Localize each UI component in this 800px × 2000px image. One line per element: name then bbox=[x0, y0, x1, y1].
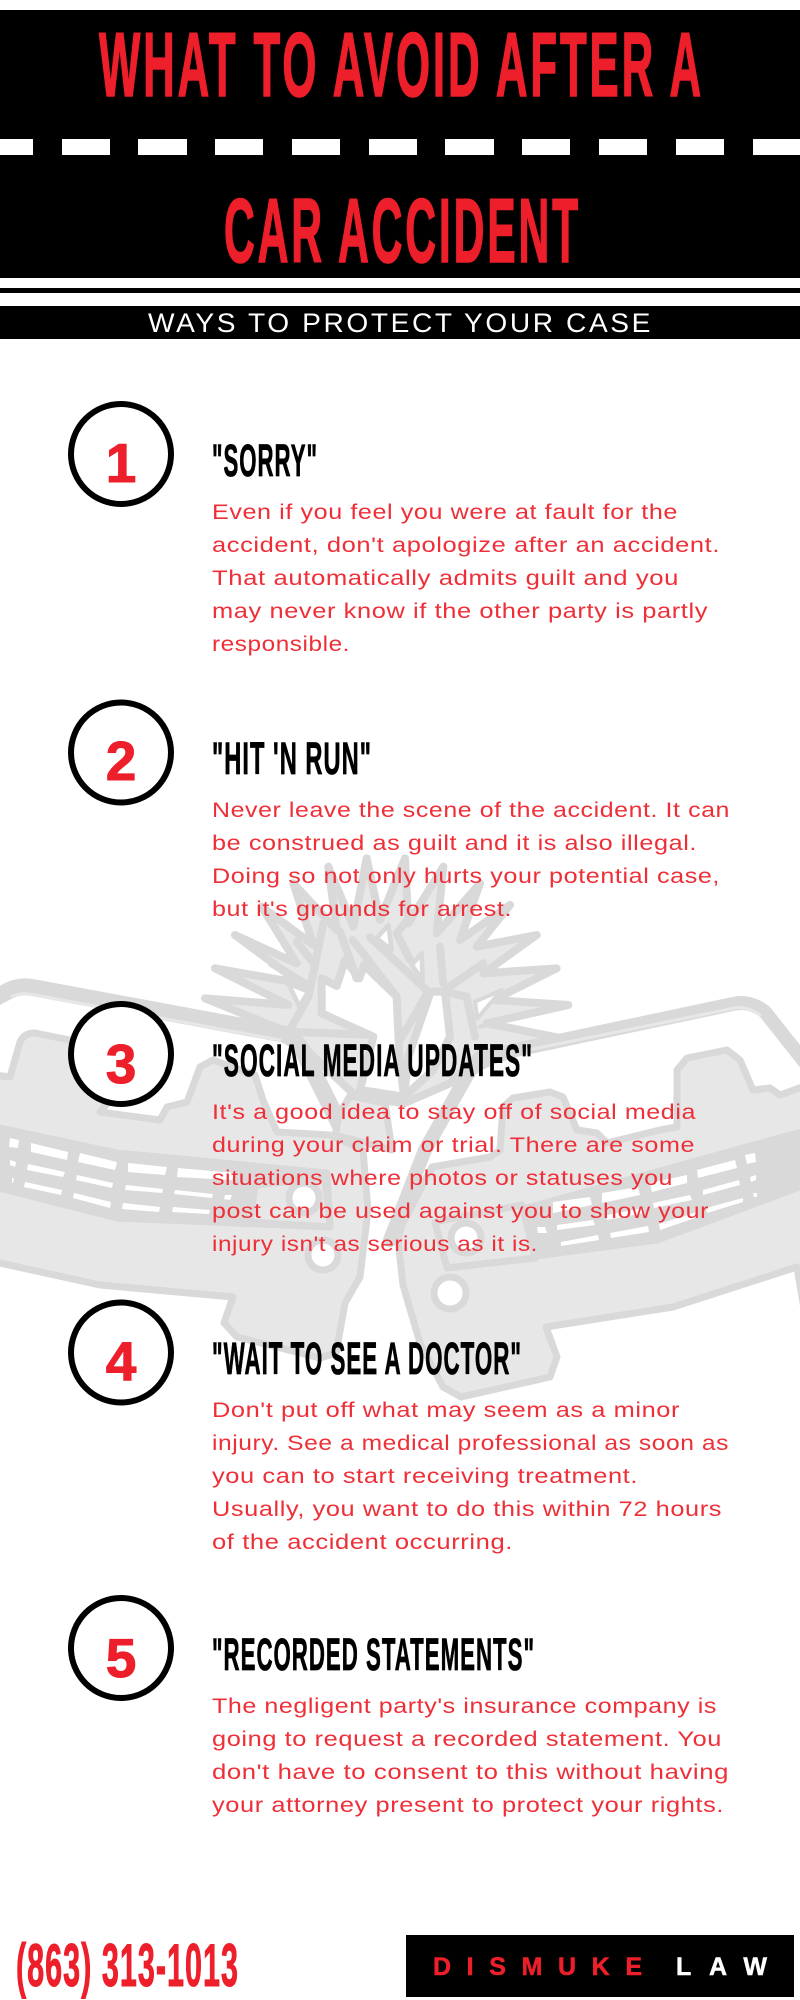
body 3: situations where photos or statuses you bbox=[212, 1166, 673, 1190]
number badge 4: 4 bbox=[106, 1330, 137, 1392]
body 3: It's a good idea to stay off of social media bbox=[212, 1100, 696, 1124]
body 4: Don't put off what may seem as a minor bbox=[212, 1398, 680, 1422]
body 2 bbox=[212, 798, 730, 921]
step 3 bbox=[71, 1004, 709, 1256]
right car: body bbox=[398, 1050, 800, 1397]
body 1: responsible. bbox=[212, 632, 350, 656]
body 1 bbox=[212, 500, 720, 656]
logo: Dismuke Law: DISMUKE bbox=[433, 1953, 642, 1981]
body 1: may never know if the other party is partly bbox=[212, 599, 708, 623]
number badge 5: 5 bbox=[106, 1627, 136, 1689]
body 1: Even if you feel you were at fault for the bbox=[212, 500, 678, 524]
body 4: Usually, you want to do this within 72 hours bbox=[212, 1497, 722, 1521]
subtitle bar: WAYS TO PROTECT YOUR CASE bbox=[148, 308, 653, 338]
body 4: you can to start receiving treatment. bbox=[212, 1464, 638, 1488]
body 5: going to request a recorded statement. You bbox=[212, 1727, 722, 1751]
left car: headlight bbox=[250, 1178, 330, 1227]
body 3: injury isn't as serious as it is. bbox=[212, 1232, 538, 1256]
body 3: post can be used against you to show your bbox=[212, 1199, 709, 1223]
illustration: crashed cars and impact burst bbox=[0, 858, 800, 1397]
body 4 bbox=[212, 1398, 729, 1554]
road dashes bbox=[0, 139, 800, 155]
header banner bbox=[0, 10, 800, 282]
number badge 1: 1 bbox=[106, 432, 136, 494]
number badge 5 bbox=[71, 1598, 171, 1698]
number badge 2 bbox=[71, 702, 171, 802]
body 4: injury. See a medical professional as soon as bbox=[212, 1431, 729, 1455]
left car: body bbox=[0, 1033, 368, 1358]
left car: grille bbox=[0, 1127, 330, 1227]
body 5: The negligent party's insurance company is bbox=[212, 1694, 717, 1718]
body 3 bbox=[212, 1100, 709, 1256]
right car: hood bbox=[390, 1003, 800, 1240]
number badge 2: 2 bbox=[106, 730, 136, 792]
left car: bumper hole bbox=[308, 1240, 338, 1270]
step 4 bbox=[71, 1302, 729, 1554]
body 3: during your claim or trial. There are some bbox=[212, 1133, 695, 1157]
body 1: That automatically admits guilt and you bbox=[212, 566, 679, 590]
body 5 bbox=[212, 1694, 729, 1817]
subtitle bar bbox=[0, 306, 800, 339]
number badge 1 bbox=[71, 404, 171, 504]
step 1 bbox=[71, 404, 720, 656]
body 5: your attorney present to protect your rights. bbox=[212, 1793, 724, 1817]
body 4: of the accident occurring. bbox=[212, 1530, 513, 1554]
step 2 bbox=[71, 702, 730, 921]
number badge 3 bbox=[71, 1004, 171, 1104]
step 5 bbox=[71, 1598, 729, 1817]
body 2: be construed as guilt and it is also illegal. bbox=[212, 831, 697, 855]
body 1: accident, don't apologize after an accident. bbox=[212, 533, 720, 557]
phone number: (863) 313-1013 bbox=[16, 1932, 239, 1999]
number badge 4 bbox=[71, 1302, 171, 1402]
right car: grille bbox=[520, 1131, 800, 1258]
step 1: "SORRY" bbox=[212, 435, 318, 486]
heading 2: "HIT 'N RUN" bbox=[212, 733, 372, 784]
logo: Dismuke Law bbox=[406, 1935, 794, 1997]
body 5: don't have to consent to this without having bbox=[212, 1760, 729, 1784]
impact burst bbox=[205, 858, 570, 1103]
left car: hood bbox=[0, 987, 345, 1135]
body 2: but it's grounds for arrest. bbox=[212, 897, 512, 921]
body 2: Never leave the scene of the accident. It can bbox=[212, 798, 730, 822]
number badge 3: 3 bbox=[106, 1033, 136, 1095]
right car: bumper hole bbox=[434, 1277, 466, 1309]
logo: Dismuke Law: LAW bbox=[676, 1953, 767, 1981]
right car: headlight bbox=[435, 1148, 800, 1268]
body 2: Doing so not only hurts your potential case, bbox=[212, 864, 720, 888]
mirror shape bbox=[335, 1096, 392, 1150]
